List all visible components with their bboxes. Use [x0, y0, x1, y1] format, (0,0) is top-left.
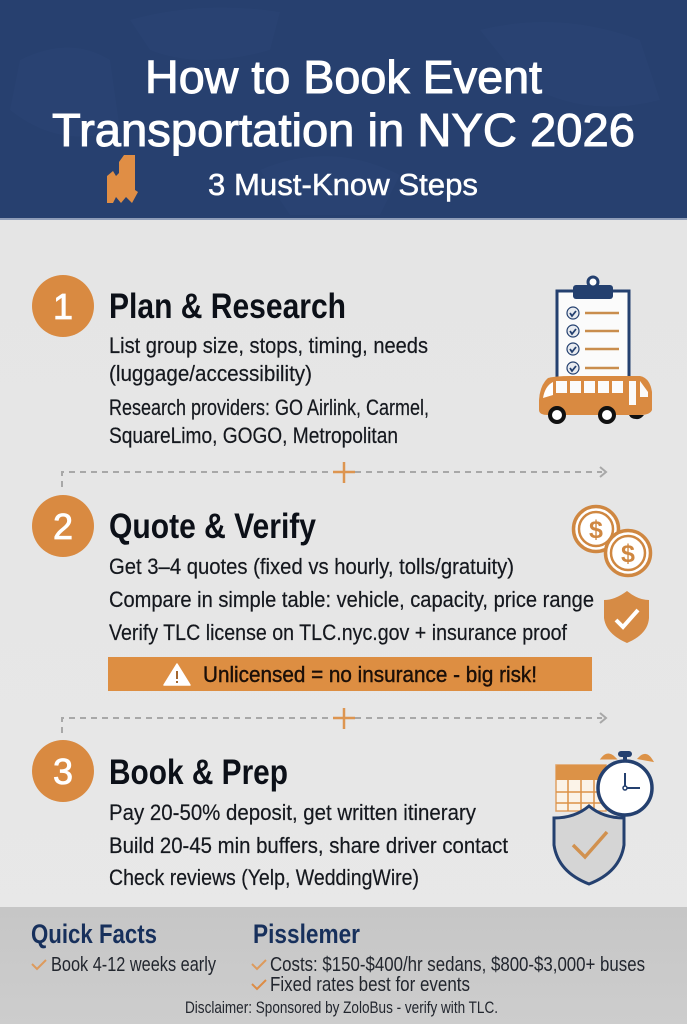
step 3 text [109, 800, 508, 890]
step 1 text [109, 333, 429, 448]
icon: clipboard and bus [539, 277, 652, 422]
step 1 number badge: 1 [53, 286, 73, 327]
icon: warning triangle [164, 664, 190, 685]
icon: calendar, stopwatch and shield [554, 751, 652, 884]
step 2 text: Get 3–4 quotes (fixed vs hourly, tolls/gratuity) [109, 554, 514, 579]
step 3 number badge [32, 740, 94, 802]
quick facts heading: Quick Facts [31, 919, 157, 949]
step 2 text: Compare in simple table: vehicle, capacity, price range [109, 587, 594, 612]
step 3 text: Check reviews (Yelp, WeddingWire) [109, 865, 419, 890]
warning banner [108, 657, 592, 691]
icon: dollar coins [574, 506, 650, 576]
icon: orange shield with check [604, 591, 649, 643]
step 1 number badge [32, 275, 94, 337]
step 1 heading: Plan & Research [109, 287, 346, 326]
title: How to Book Event [145, 51, 542, 103]
icon: dollar coins: $ [589, 516, 603, 544]
pisslemer items: Fixed rates best for events [270, 974, 470, 996]
step 1: plan and research [32, 275, 652, 448]
step 3 number badge: 3 [53, 751, 73, 792]
quick facts item: Book 4-12 weeks early [51, 954, 216, 976]
step 1 text: Research providers: GO Airlink, Carmel, [109, 395, 429, 420]
step 3 text: Build 20-45 min buffers, share driver contact [109, 833, 508, 858]
subtitle: 3 Must-Know Steps [208, 167, 478, 202]
step 2: quote and verify [32, 495, 650, 691]
step 2 heading: Quote & Verify [109, 507, 316, 546]
step 1 text: SquareLimo, GOGO, Metropolitan [109, 423, 398, 448]
disclaimer: Disclaimer: Sponsored by ZoloBus - verify with TLC. [185, 998, 498, 1017]
step 3 heading: Book & Prep [109, 753, 288, 792]
title [52, 51, 635, 156]
step 3: book and prep [32, 740, 652, 890]
step 1 text: List group size, stops, timing, needs [109, 333, 428, 358]
step 2 text: Verify TLC license on TLC.nyc.gov + insurance proof [109, 620, 568, 645]
step 2 number badge [32, 495, 94, 557]
connector arrow 1 [62, 462, 606, 487]
step 1 text: (luggage/accessibility) [109, 361, 312, 386]
pisslemer heading: Pisslemer [253, 919, 360, 949]
header banner [0, 0, 687, 220]
icon: orange skyline [107, 155, 138, 203]
title: Transportation in NYC 2026 [52, 104, 635, 156]
warning banner: Unlicensed = no insurance - big risk! [203, 662, 537, 687]
connector arrow 2 [62, 708, 606, 733]
footer panel [0, 907, 687, 1024]
step 2 text [109, 554, 594, 645]
step 3 text: Pay 20-50% deposit, get written itinerary [109, 800, 476, 825]
pisslemer items [252, 954, 645, 996]
icon: dollar coins: $ [621, 540, 635, 568]
step 2 number badge: 2 [53, 506, 73, 547]
